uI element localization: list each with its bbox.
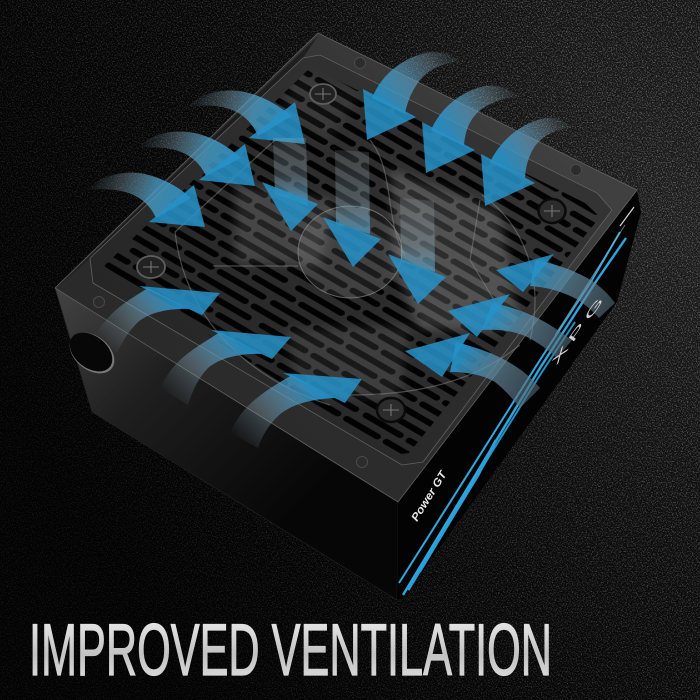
arrow: right 1 <box>496 254 615 318</box>
arrow: center down 3 <box>388 198 446 304</box>
right side face with blue stripes <box>397 190 641 600</box>
arrow: bottom-left 2 <box>160 330 291 405</box>
arrow: top-left 3 <box>88 173 205 227</box>
power supply unit <box>55 30 641 600</box>
arrow: top-left 2 <box>138 132 255 186</box>
mounting screws <box>137 84 566 422</box>
arrow: top-right 3 <box>481 118 572 206</box>
airflow arrows <box>88 52 615 448</box>
top plate <box>90 55 612 465</box>
arrow: center down 2 <box>323 150 381 267</box>
shaded upper-left rim <box>58 36 318 287</box>
arrow: top-right 1 <box>363 52 462 140</box>
ventilation grill <box>104 70 597 454</box>
left side face <box>55 288 398 600</box>
side screws <box>94 58 582 468</box>
power switch socket <box>62 324 122 382</box>
fan blades seen through grill <box>235 70 520 400</box>
arrow: bottom-left 1 <box>95 286 220 353</box>
fan blade outlines <box>175 140 535 405</box>
arrow: top-left 1 <box>187 91 305 144</box>
side logo: Power GT <box>410 469 450 524</box>
top face <box>55 33 637 502</box>
side model lettering: XPG <box>550 291 609 367</box>
arrow: right 3 <box>405 333 540 408</box>
arrow: bottom-left 3 <box>230 373 362 448</box>
arrow: center down 1 <box>262 138 318 231</box>
arrow: right 2 <box>448 294 572 358</box>
arrow: top-right 2 <box>422 86 520 173</box>
